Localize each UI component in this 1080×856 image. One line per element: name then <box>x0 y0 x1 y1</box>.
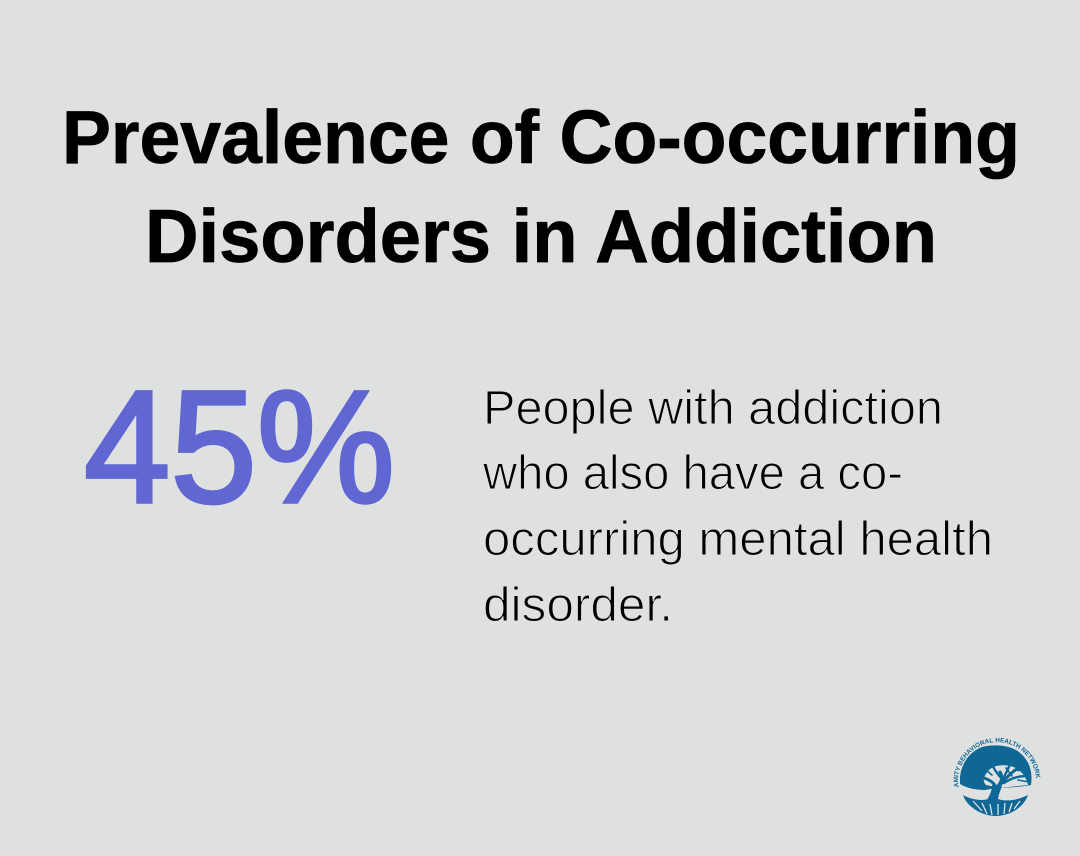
description text: People with addiction <box>483 382 943 435</box>
title: Disorders in Addiction <box>145 194 937 278</box>
icon: canopy opening <box>984 765 1028 788</box>
title: Prevalence of Co-occurring <box>62 95 1020 179</box>
big statistic: 45%: 45% <box>84 357 395 536</box>
icon: tree canopy <box>960 745 1032 790</box>
icon: tree trunk <box>986 785 1002 802</box>
logo text: AMITY BEHAVIORAL HEALTH NETWORK <box>954 738 1040 787</box>
icon: tree roots <box>963 795 1028 816</box>
description text: occurring mental health <box>483 513 993 566</box>
description text <box>482 382 993 632</box>
logo: Amity Behavioral Health Network <box>954 738 1040 816</box>
description text: who also have a co- <box>482 447 903 500</box>
title <box>62 95 1020 278</box>
description text: disorder. <box>483 579 673 632</box>
icon: tree branches <box>984 764 1029 787</box>
